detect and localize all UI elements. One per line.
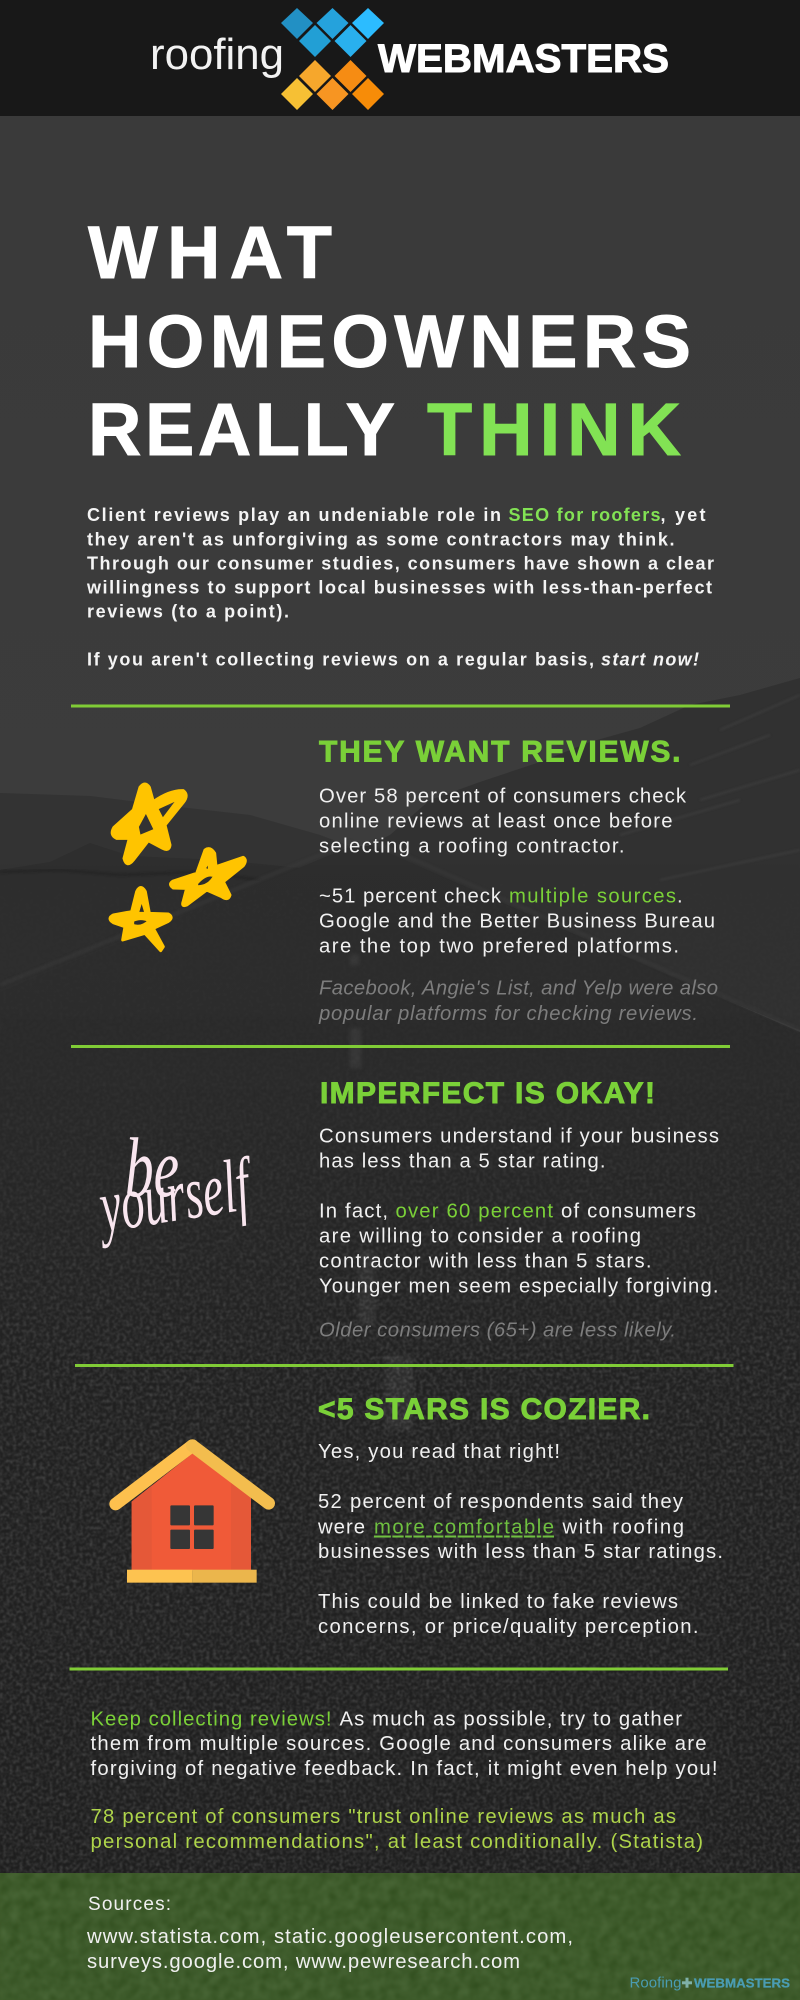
body text: reviews: online reviews at least once before <box>319 810 672 832</box>
divider 1 <box>71 704 730 708</box>
heading: they want reviews: THEY WANT REVIEWS. <box>319 736 680 768</box>
closing text: As much as possible, try to gather <box>340 1708 682 1730</box>
intro paragraph <box>86 505 714 670</box>
intro paragraph: Client reviews play an undeniable role in <box>87 505 501 525</box>
panel: fewer than 5 stars is cozier <box>317 1393 723 1638</box>
sources: Sources: <box>88 1894 171 1915</box>
closing text: personal recommendations", at least conditionally. (Statista) <box>90 1831 703 1853</box>
divider 2 <box>71 1045 730 1048</box>
body text: imperfect: over 60 percent <box>396 1200 553 1222</box>
body text: imperfect: In fact, <box>319 1200 388 1222</box>
icon: be yourself lettering: be <box>125 1120 179 1215</box>
intro paragraph: SEO for roofers <box>508 505 660 525</box>
body text: cozier: Yes, you read that right! <box>318 1441 560 1463</box>
closing text: Keep collecting reviews! <box>90 1708 332 1730</box>
body text: reviews: selecting a roofing contractor. <box>319 836 624 858</box>
panel: they want reviews <box>318 736 718 1025</box>
footer band <box>0 1873 800 2000</box>
intro paragraph: start now! <box>601 650 699 670</box>
body text: imperfect <box>319 1126 719 1342</box>
divider 3 <box>75 1364 734 1367</box>
body text: reviews: popular platforms for checking reviews. <box>318 1003 698 1025</box>
body text: cozier: This could be linked to fake reviews <box>318 1591 678 1613</box>
closing text <box>90 1708 718 1853</box>
footer logo <box>630 1974 790 1992</box>
icon: three hand-drawn stars <box>110 784 245 951</box>
divider 4 <box>70 1668 728 1670</box>
body text: cozier: were <box>317 1516 365 1538</box>
body text: imperfect: has less than a 5 star rating. <box>319 1150 606 1172</box>
closing text: forgiving of negative feedback. In fact, it might even help you! <box>90 1758 718 1780</box>
sources: www.statista.com, static.googleusercontent.com, <box>86 1926 573 1948</box>
body text: cozier: businesses with less than 5 star ratings. <box>318 1541 723 1563</box>
sources <box>86 1894 573 1973</box>
intro paragraph: reviews (to a point). <box>87 602 289 622</box>
closing text: them from multiple sources. Google and consumers alike are <box>90 1733 706 1755</box>
intro paragraph: If you aren't collecting reviews on a regular basis, <box>87 650 594 670</box>
intro paragraph: willingness to support local businesses with less-than-perfect <box>86 578 712 598</box>
icon: be yourself lettering: yourself <box>89 1142 261 1250</box>
body text: cozier: more comfortable <box>374 1516 554 1538</box>
heading: imperfect is okay: IMPERFECT IS OKAY! <box>320 1077 655 1110</box>
body text: reviews: Facebook, Angie's List, and Yelp were also <box>319 978 718 1000</box>
heading: cozier: <5 STARS IS COZIER. <box>318 1393 650 1426</box>
body text: reviews: Over 58 percent of consumers check <box>319 786 687 808</box>
footer logo: Roofing <box>630 1974 682 1992</box>
body text: cozier <box>317 1441 723 1638</box>
logo: roofing webmasters: WEBMASTERS <box>378 37 669 81</box>
intro paragraph: they aren't as unforgiving as some contractors may think. <box>87 530 675 550</box>
closing text: 78 percent of consumers "trust online reviews as much as <box>90 1806 676 1828</box>
body text: cozier: concerns, or price/quality perception. <box>318 1616 698 1638</box>
sources: surveys.google.com, www.pewresearch.com <box>87 1951 520 1973</box>
footer logo: WEBMASTERS <box>694 1976 790 1990</box>
body text: cozier: with roofing <box>562 1516 684 1538</box>
title: THINK <box>427 388 681 471</box>
title: HOMEOWNERS <box>88 300 691 383</box>
title <box>88 211 691 471</box>
title: REALLY <box>88 388 395 471</box>
body text: imperfect: of consumers <box>561 1200 696 1222</box>
intro paragraph: Through our consumer studies, consumers have shown a clear <box>87 554 714 574</box>
header bar <box>0 0 800 116</box>
title: WHAT <box>88 211 332 294</box>
body text: cozier: 52 percent of respondents said they <box>318 1491 684 1513</box>
panel: imperfect is okay <box>319 1077 719 1342</box>
intro paragraph: , yet <box>660 505 706 525</box>
icon: house <box>116 1446 269 1583</box>
body text: reviews <box>318 786 718 1025</box>
body text: reviews: multiple sources <box>509 886 676 908</box>
logo: roofing webmasters: roofing <box>150 30 284 79</box>
body text: imperfect: Younger men seem especially forgiving. <box>319 1276 718 1298</box>
body text: reviews: are the top two prefered platforms. <box>319 936 679 958</box>
body text: reviews: ~51 percent check <box>319 886 502 908</box>
body text: imperfect: Older consumers (65+) are less likely. <box>319 1320 676 1342</box>
body text: reviews: . <box>677 886 683 908</box>
body text: reviews: Google and the Better Business Bureau <box>319 910 715 932</box>
body text: imperfect: are willing to consider a roofing <box>319 1226 641 1248</box>
body text: imperfect: Consumers understand if your business <box>319 1126 719 1148</box>
body text: imperfect: contractor with less than 5 stars. <box>319 1250 652 1272</box>
logo: roofing webmasters <box>150 8 669 110</box>
